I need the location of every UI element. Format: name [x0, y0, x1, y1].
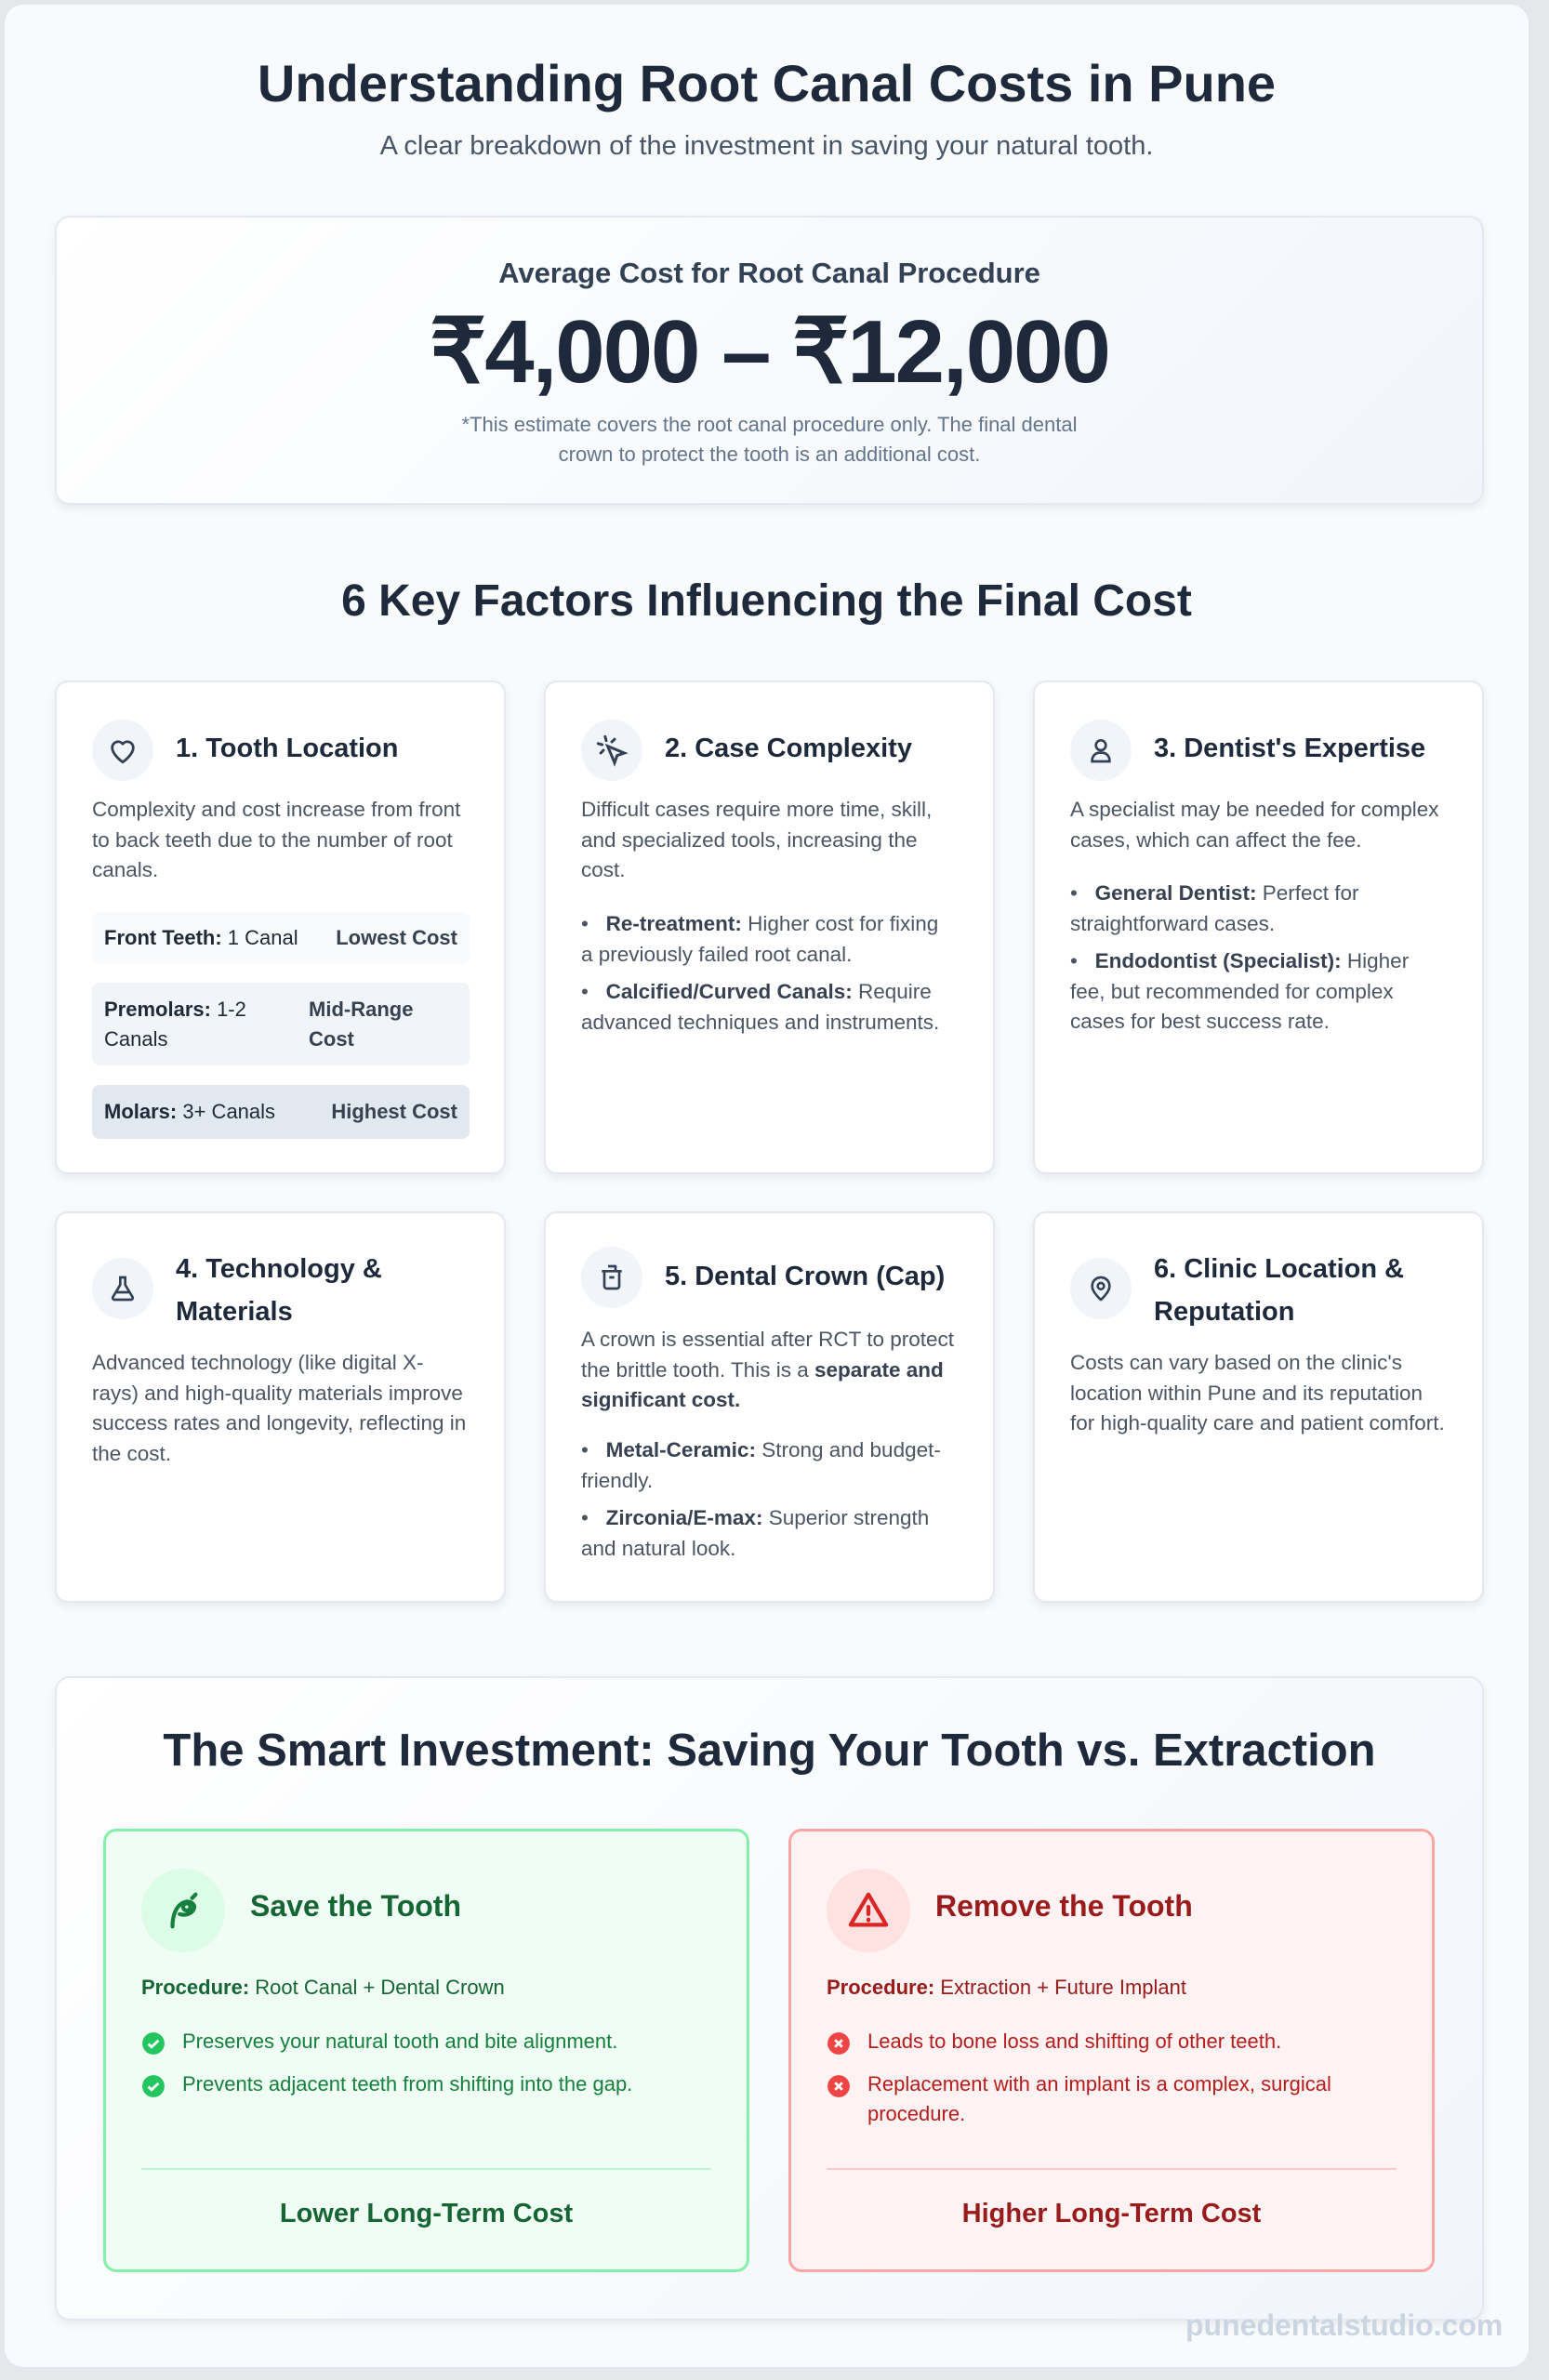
description	[581, 798, 932, 881]
table rows: Lowest Cost	[336, 926, 457, 949]
panel: technology	[55, 1211, 506, 1603]
watermark: punedentalstudio.com	[1185, 2308, 1503, 2342]
icon: crown cap	[581, 1247, 642, 1308]
note: crown to protect the tooth is an additional cost.	[559, 443, 980, 466]
bullets: • Endodontist (Specialist): Higher	[1070, 949, 1409, 972]
description	[1070, 1351, 1445, 1435]
icon: person	[1070, 720, 1132, 781]
panel: average cost	[55, 216, 1484, 505]
icon: heart	[92, 720, 153, 781]
benefits: Preserves your natural tooth and bite alignment.	[182, 2030, 617, 2053]
box title: Save the Tooth	[250, 1889, 461, 1923]
bullets	[581, 912, 939, 1034]
bullets: • General Dentist: Perfect for	[1070, 881, 1358, 905]
procedure: Procedure: Root Canal + Dental Crown	[141, 1976, 505, 1999]
title: Understanding Root Canal Costs in Pune	[258, 54, 1276, 112]
bullets: and natural look.	[581, 1536, 735, 1560]
drawbacks: Leads to bone loss and shifting of other teeth.	[867, 2030, 1281, 2053]
description: the brittle tooth. This is a separate and	[581, 1357, 944, 1382]
description	[92, 798, 461, 881]
cost label: Higher Long-Term Cost	[962, 2199, 1261, 2228]
card title: 6. Clinic Location &	[1154, 1254, 1404, 1284]
description: to back teeth due to the number of root	[92, 827, 453, 852]
description: Advanced technology (like digital X-	[92, 1351, 423, 1374]
description	[1070, 798, 1439, 852]
description: and specialized tools, increasing the	[581, 827, 917, 852]
table rows: Front Teeth: 1 Canal	[104, 926, 298, 949]
card title: 1. Tooth Location	[176, 734, 398, 763]
card title: 3. Dentist's Expertise	[1154, 734, 1425, 763]
table rows: Highest Cost	[331, 1100, 457, 1123]
table rows: Molars: 3+ Canals	[104, 1100, 275, 1123]
description: cases, which can affect the fee.	[1070, 827, 1362, 852]
section heading: The Smart Investment: Saving Your Tooth vs. Extraction	[163, 1726, 1376, 1776]
panel: remove the tooth: Replacement with an implant is a complex, surgical procedure.	[867, 2072, 1331, 2125]
description: rays) and high-quality materials improve	[92, 1382, 463, 1404]
procedure: Procedure: Extraction + Future Implant	[827, 1976, 1186, 1999]
icon: cursor click	[581, 720, 642, 781]
description: location within Pune and its reputation	[1070, 1382, 1423, 1404]
description: Costs can vary based on the clinic's	[1070, 1351, 1402, 1374]
description	[92, 1351, 466, 1465]
panel: case complexity	[544, 681, 995, 1174]
icon: warning	[827, 1869, 910, 1952]
description: Complexity and cost increase from front	[92, 798, 460, 821]
description: Difficult cases require more time, skill,	[581, 798, 932, 821]
description: for high-quality care and patient comfort.	[1070, 1411, 1445, 1435]
description: canals.	[92, 858, 158, 881]
bullets: • Calcified/Curved Canals: Require	[581, 980, 932, 1003]
cost label: Lower Long-Term Cost	[280, 2199, 573, 2228]
panel: remove the tooth	[788, 1829, 1435, 2272]
description: A crown is essential after RCT to protect	[581, 1328, 954, 1351]
subtitle: A clear breakdown of the investment in saving your natural tooth.	[380, 131, 1153, 161]
note: *This estimate covers the root canal procedure only. The final dental	[461, 413, 1077, 436]
bullets: • Metal-Ceramic: Strong and budget-	[581, 1438, 941, 1461]
description: A specialist may be needed for complex	[1070, 798, 1438, 821]
description: the cost.	[92, 1441, 171, 1465]
bullets: cases for best success rate.	[1070, 1010, 1330, 1033]
bullets: a previously failed root canal.	[581, 943, 852, 965]
bullets	[1070, 881, 1409, 1033]
cost label: Average Cost for Root Canal Procedure	[498, 257, 1040, 289]
bullets: advanced techniques and instruments.	[581, 1010, 939, 1034]
panel: smart investment	[55, 1676, 1484, 2320]
box title: Remove the Tooth	[935, 1889, 1193, 1923]
icon: location pin	[1070, 1258, 1132, 1319]
panel: clinic location	[1033, 1211, 1484, 1603]
panel: dental crown	[544, 1211, 995, 1603]
description: success rates and longevity, reflecting in	[92, 1411, 466, 1435]
panel: tooth location	[55, 681, 506, 1174]
table rows	[92, 926, 470, 1139]
card title	[176, 1254, 382, 1327]
table rows: Premolars: 1-2 Canals	[104, 997, 246, 1051]
description	[581, 1328, 954, 1411]
bullets	[581, 1438, 941, 1560]
card title: 2. Case Complexity	[665, 734, 912, 763]
card title: Reputation	[1154, 1297, 1294, 1327]
panel: save the tooth: Prevents adjacent teeth from shifting into the gap.	[182, 2072, 632, 2096]
panel: dentist expertise	[1033, 681, 1484, 1174]
icon: tooth leaf	[141, 1869, 225, 1952]
price range: ₹4,000 – ₹12,000	[430, 302, 1109, 402]
bullets: • Re-treatment: Higher cost for fixing	[581, 912, 938, 935]
card title	[1154, 1254, 1404, 1327]
panel: save the tooth	[103, 1829, 749, 2272]
card title: 5. Dental Crown (Cap)	[665, 1262, 945, 1291]
card title: Materials	[176, 1297, 293, 1327]
bullets: friendly.	[581, 1469, 653, 1491]
bullets: fee, but recommended for complex	[1070, 980, 1394, 1002]
bullets: • Zirconia/E-max: Superior strength	[581, 1506, 929, 1529]
card title: 4. Technology &	[176, 1254, 382, 1284]
description: significant cost.	[581, 1388, 740, 1411]
table rows: Mid-Range Cost	[309, 997, 413, 1051]
note	[461, 413, 1077, 466]
bullets: straightforward cases.	[1070, 911, 1275, 935]
description: cost.	[581, 858, 626, 881]
icon: flask	[92, 1258, 153, 1319]
heading: factors: 6 Key Factors Influencing the Final Cost	[341, 576, 1192, 626]
